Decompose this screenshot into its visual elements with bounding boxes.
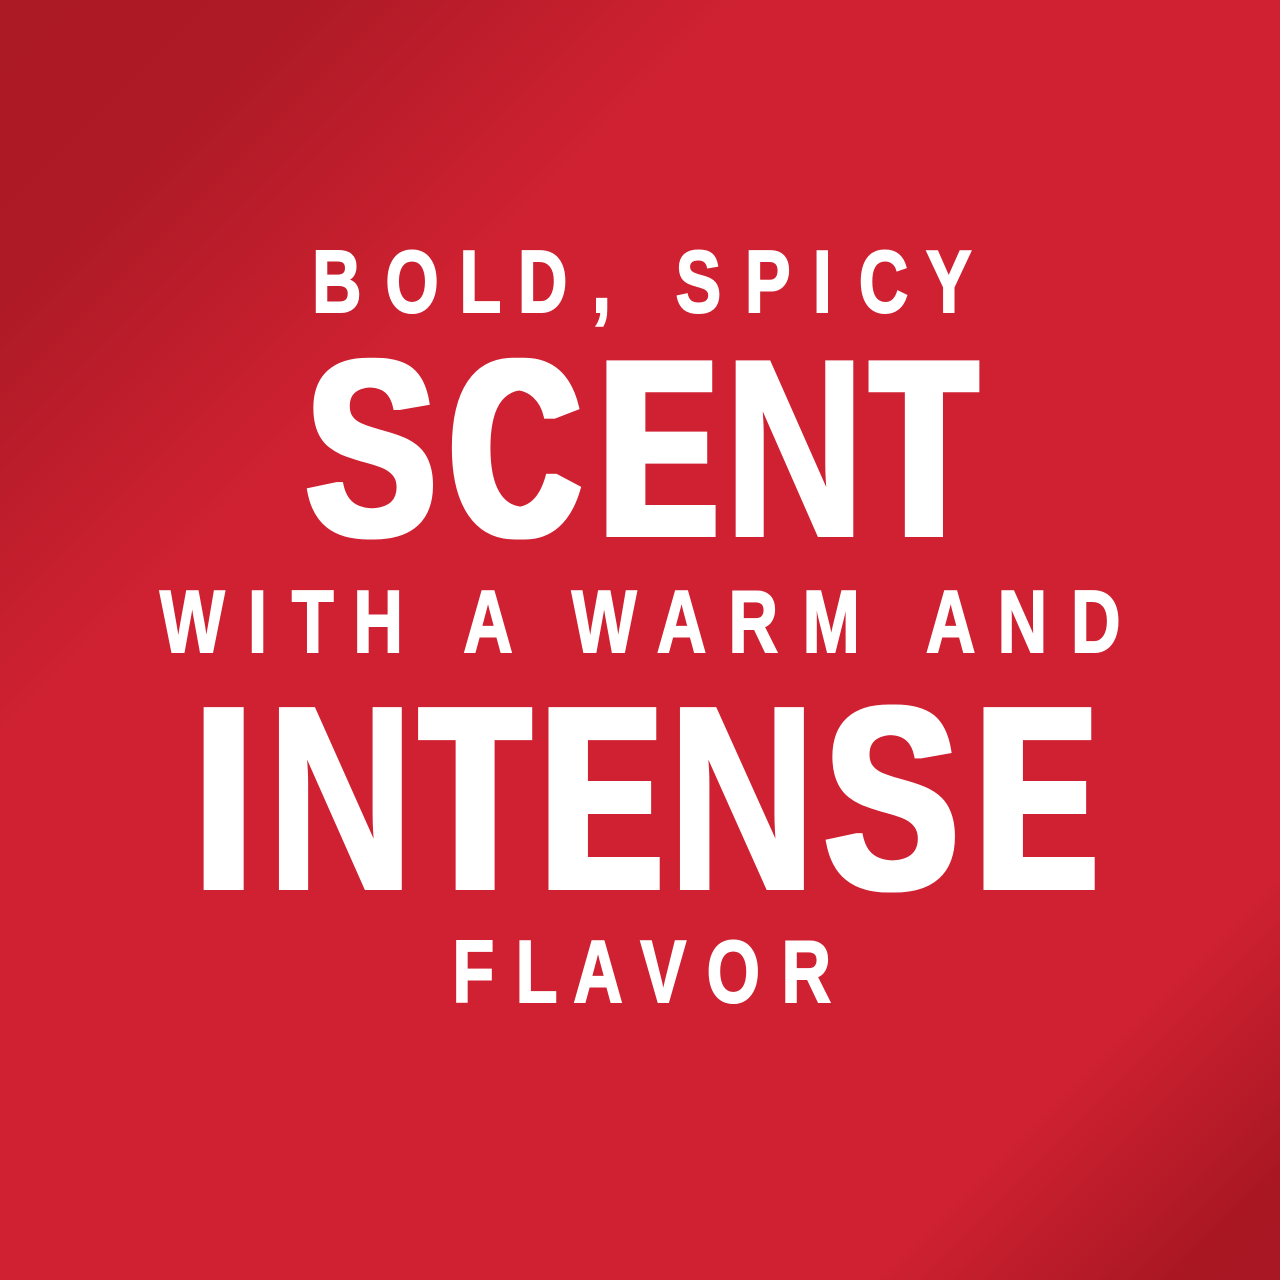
- headline text block: [160, 233, 1121, 1021]
- line: BOLD, SPICY: BOLD, SPICY: [312, 233, 972, 331]
- line: SCENT: [306, 307, 974, 589]
- line: INTENSE: T: [424, 654, 527, 944]
- line: SCENT: E: [602, 310, 715, 589]
- line: WITH A WARM AND: WITH A WARM AND: [160, 573, 1121, 671]
- line: INTENSE: S: [825, 654, 958, 944]
- line: FLAVOR: FLAVOR: [452, 923, 831, 1021]
- line: SCENT: C: [451, 309, 579, 589]
- line: SCENT: N: [724, 308, 865, 589]
- line: INTENSE: E: [544, 652, 659, 943]
- line: INTENSE: N: [267, 654, 414, 944]
- line: SCENT: S: [306, 308, 436, 589]
- line: INTENSE: N: [668, 653, 816, 943]
- line: INTENSE: [194, 652, 1094, 944]
- line: INTENSE: I: [194, 654, 253, 944]
- line: INTENSE: E: [979, 652, 1094, 943]
- line: SCENT: T: [874, 307, 974, 588]
